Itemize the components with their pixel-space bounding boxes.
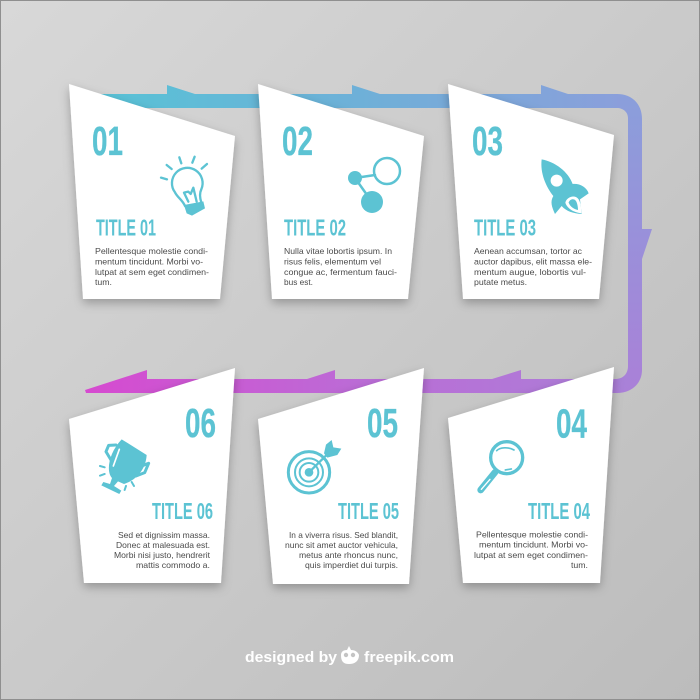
body text 01: tum. (95, 278, 112, 287)
icon: magnifying glass (481, 442, 523, 490)
body text 05: metus ante rhoncus nunc, (299, 551, 398, 560)
body text 06: Morbi nisi justo, hendrerit (114, 551, 211, 560)
icon: target with dart (288, 440, 341, 493)
body text 04: Pellentesque molestie condi- (476, 530, 588, 540)
number 05: 05 (367, 400, 398, 446)
body text 03 (474, 247, 592, 287)
panel: step 02 (258, 84, 424, 299)
body text 01 (95, 247, 209, 287)
body text 02: bus est. (284, 278, 313, 287)
body text 06: Donec at malesuada est. (116, 541, 210, 550)
footer credit (245, 646, 454, 666)
title 06: TITLE 06 (152, 498, 213, 524)
body text 02 (284, 247, 397, 287)
panel: step 04 (448, 367, 614, 583)
body text 01: lutpat at sem eget condimen- (95, 268, 209, 277)
body text 05 (285, 531, 398, 570)
title 05: TITLE 05 (338, 498, 399, 524)
body text 05: In a viverra risus. Sed blandit, (289, 531, 398, 540)
title 01: TITLE 01 (96, 214, 156, 240)
body text 01: Pellentesque molestie condi- (95, 247, 208, 256)
body text 01: mentum tincidunt. Morbi vo- (95, 258, 203, 266)
body text 03: putate metus. (474, 278, 527, 287)
body text 04 (474, 530, 588, 570)
panel: step 05 (258, 368, 424, 584)
icon: molecule nodes (348, 158, 400, 213)
freepik wordmark: freepik.com (364, 649, 454, 666)
body text 04: lutpat at sem eget condimen- (474, 551, 588, 560)
icon: light bulb (161, 157, 207, 216)
body text 02: congue ac, fermentum fauci- (284, 268, 397, 277)
number 02: 02 (282, 118, 313, 164)
footer credit: designed by (245, 649, 338, 666)
arrow: flow path from step 01 to step 06 (85, 85, 652, 393)
panel: step 06 (69, 368, 235, 583)
body text 05: quis imperdiet dui turpis. (305, 561, 398, 570)
title 04: TITLE 04 (528, 498, 590, 524)
body text 06: mattis commodo a. (136, 561, 210, 570)
icon: rocket (541, 159, 589, 214)
number 06: 06 (185, 400, 216, 446)
number 03: 03 (472, 118, 503, 164)
body text 03: Aenean accumsan, tortor ac (474, 247, 582, 256)
body text 02: risus felis, elementum vel (284, 258, 381, 266)
panel: step 03 (448, 84, 614, 299)
title 02: TITLE 02 (284, 214, 346, 240)
body text 03: auctor dapibus, elit massa ele- (474, 258, 592, 266)
number 04: 04 (556, 400, 587, 446)
icon: freepik logo (341, 646, 359, 664)
body text 05: nunc sit amet auctor vehicula, (285, 541, 398, 550)
panel: step 01 (69, 84, 235, 299)
body text 04: tum. (571, 561, 588, 570)
body text 06 (114, 531, 211, 570)
title 03: TITLE 03 (474, 214, 536, 240)
number 01: 01 (92, 118, 123, 164)
icon: trophy (100, 439, 149, 494)
body text 04: mentum tincidunt. Morbi vo- (479, 540, 588, 550)
body text 06: Sed et dignissim massa. (118, 531, 210, 540)
body text 03: mentum augue, lobortis vul- (474, 268, 586, 277)
body text 02: Nulla vitae lobortis ipsum. In (284, 247, 392, 256)
